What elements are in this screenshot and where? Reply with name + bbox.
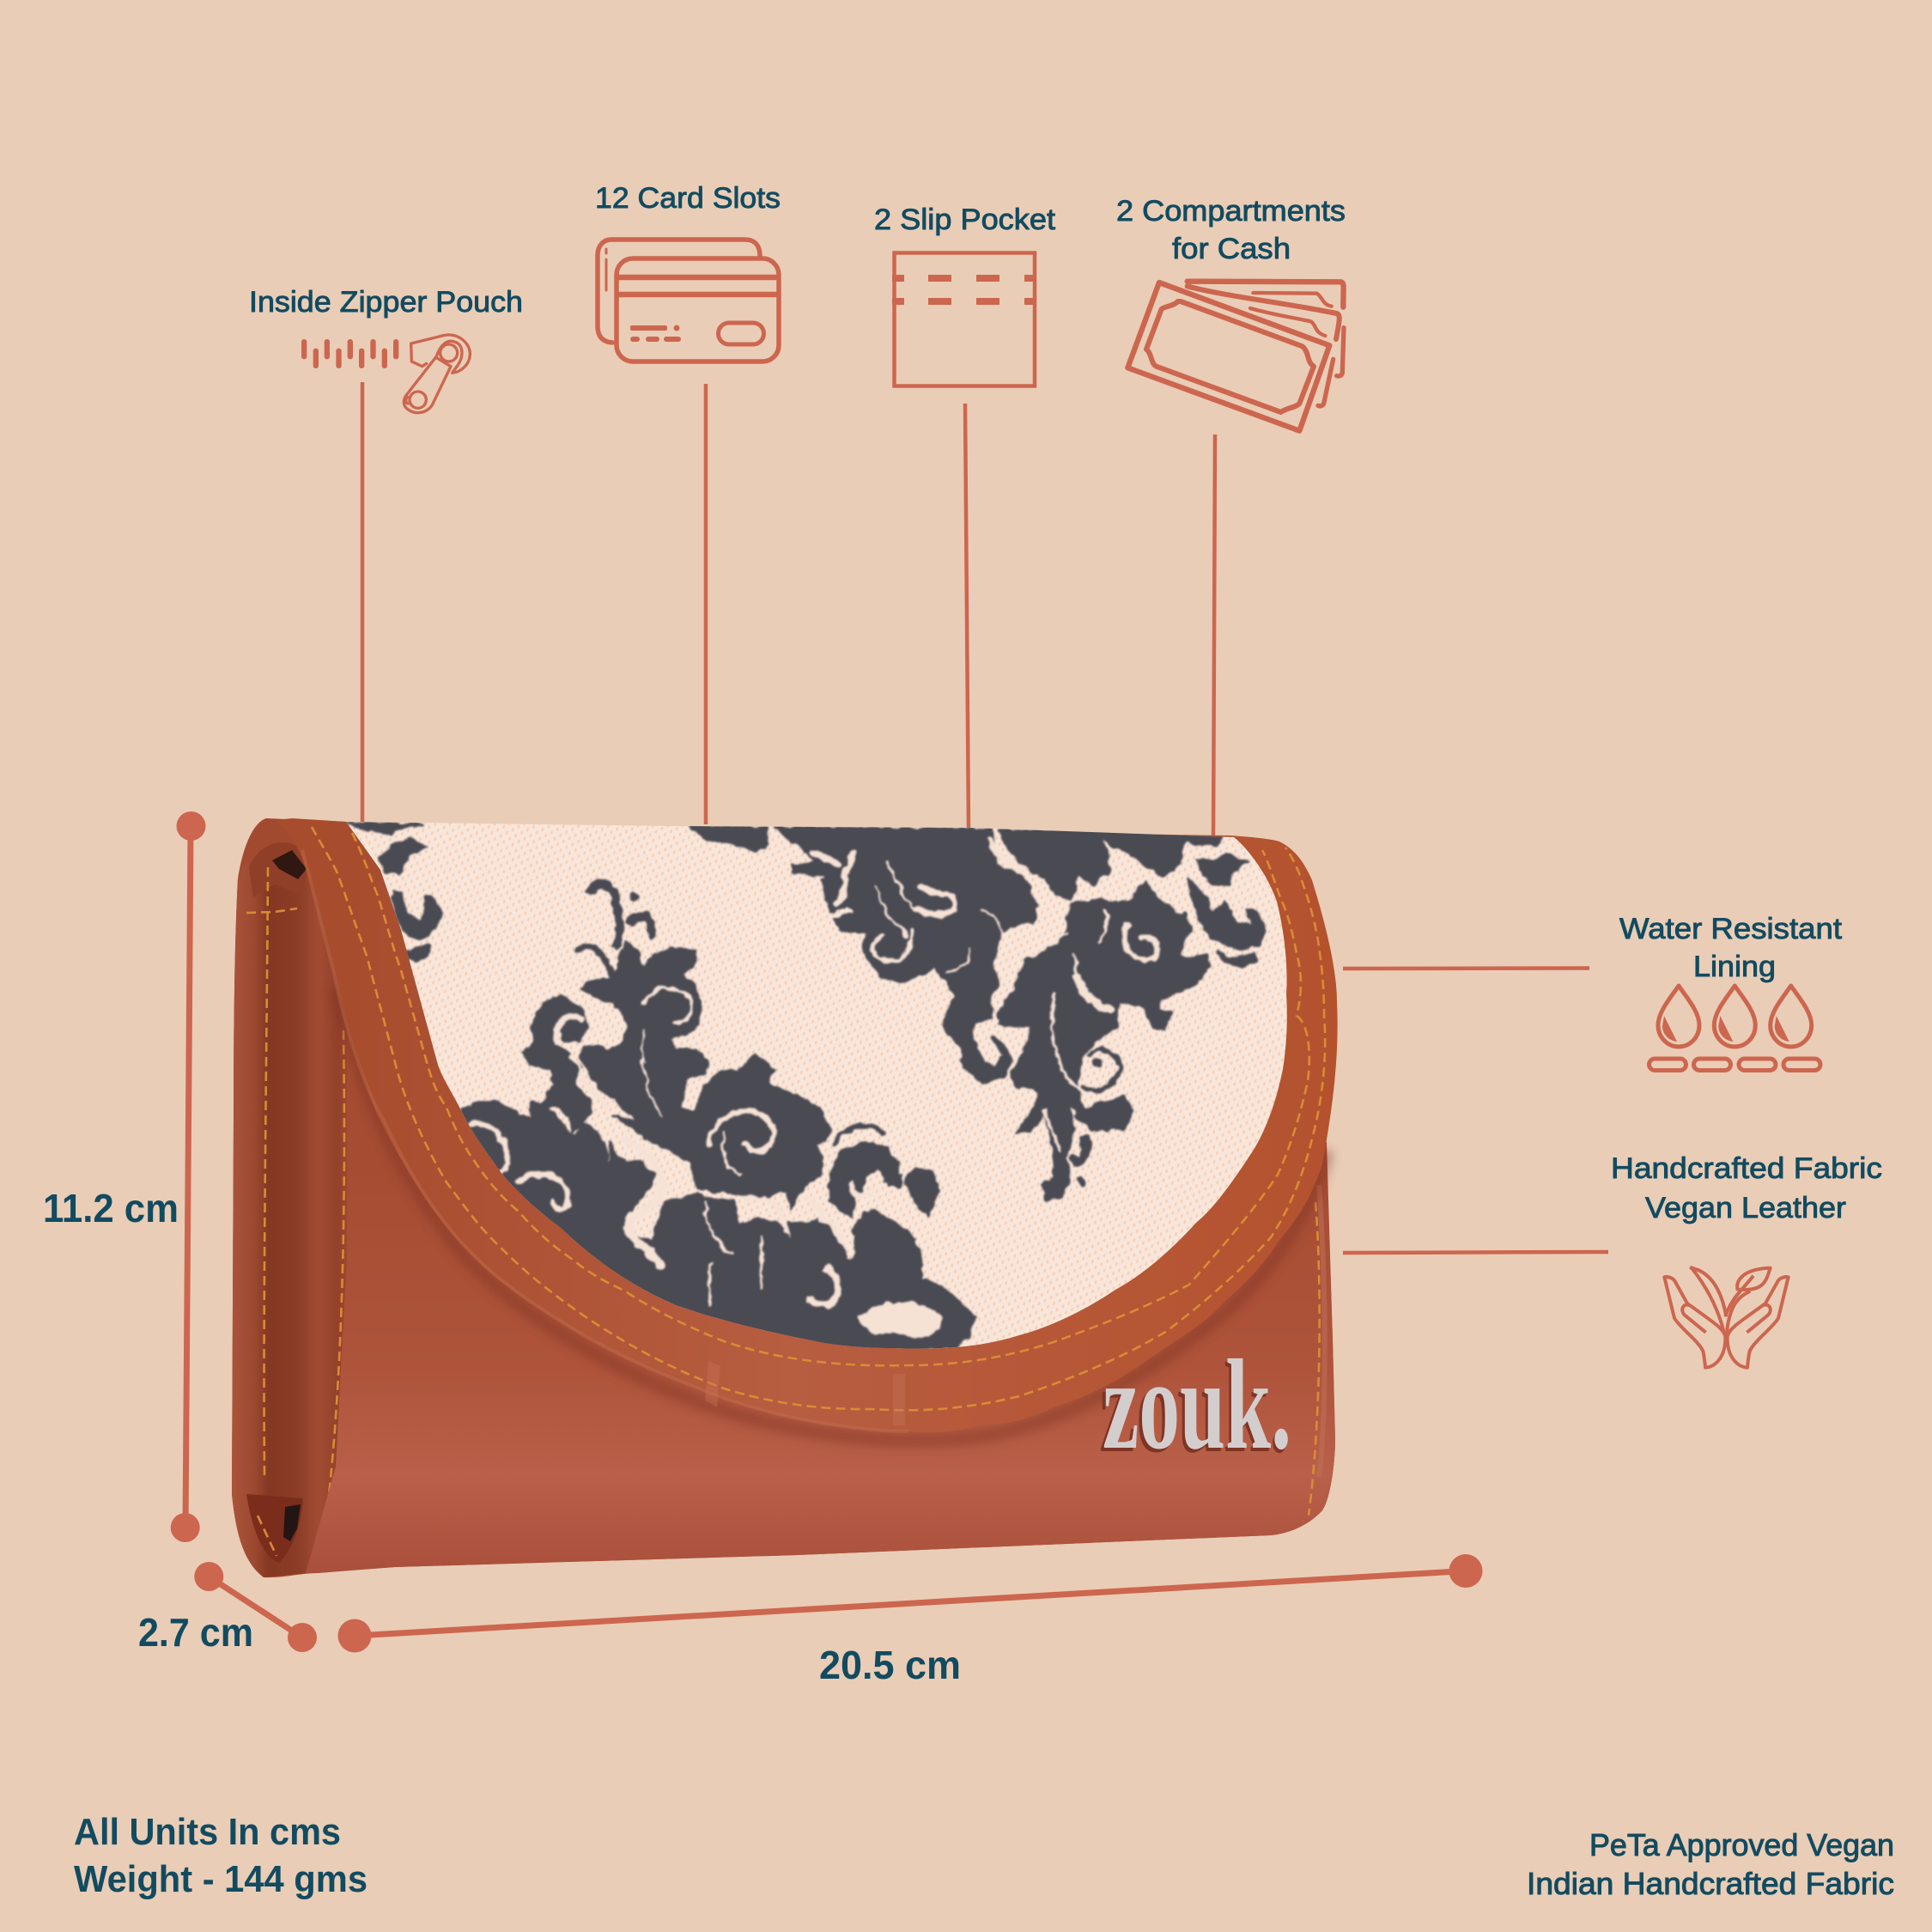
note: peta approved: Indian Handcrafted Fabric bbox=[1527, 1866, 1894, 1901]
label: handcrafted fabric vegan leather: Vegan Leather bbox=[1645, 1192, 1846, 1224]
printed fabric panel bbox=[326, 807, 1305, 1365]
label: compartments for cash: for Cash bbox=[1172, 233, 1291, 265]
icon: cards bbox=[598, 240, 779, 361]
note: peta approved: PeTa Approved Vegan bbox=[1589, 1827, 1894, 1862]
note: units and weight: All Units In cms bbox=[74, 1811, 341, 1853]
flap cast shadow bbox=[336, 987, 1327, 1441]
label: water resistant lining: Lining bbox=[1693, 951, 1776, 983]
icon: water drops bbox=[1649, 986, 1820, 1070]
damask print bbox=[346, 823, 1265, 1359]
icon: zipper bbox=[301, 335, 470, 413]
upper damask motif bbox=[690, 826, 1133, 1200]
lower-right damask ring bbox=[790, 1176, 976, 1351]
wallet silhouette bbox=[232, 818, 1335, 1577]
dimension: height bbox=[43, 811, 206, 1542]
zouk logo: zouk. bbox=[1103, 1334, 1291, 1476]
label: handcrafted fabric vegan leather: Handcrafted Fabric bbox=[1611, 1152, 1882, 1185]
left gusset bbox=[232, 863, 354, 1577]
upper damask light details bbox=[813, 839, 1110, 1151]
right damask fragments bbox=[1093, 830, 1265, 1030]
note: units and weight bbox=[74, 1811, 368, 1900]
zouk logo shadow: zouk. bbox=[1099, 1337, 1290, 1479]
lower damask motif bbox=[455, 884, 939, 1359]
label: water resistant lining bbox=[1619, 913, 1843, 983]
note: peta approved bbox=[1527, 1827, 1894, 1901]
label: inside zipper pouch: Inside Zipper Pouch bbox=[249, 286, 523, 319]
front panel bbox=[306, 1013, 1335, 1573]
right damask light details bbox=[1099, 910, 1157, 961]
lower damask light details bbox=[470, 987, 876, 1305]
gusset stitches and openings bbox=[246, 842, 344, 1567]
label: water resistant lining: Water Resistant bbox=[1619, 913, 1843, 945]
front panel right rim bbox=[1319, 1185, 1325, 1477]
label: slip pocket: 2 Slip Pocket bbox=[874, 204, 1056, 236]
dimension: depth: 2.7 cm bbox=[138, 1610, 253, 1655]
icon: hands with leaf bbox=[1664, 1268, 1789, 1368]
icon: pocket bbox=[892, 252, 1036, 386]
wallet product photo bbox=[232, 807, 1338, 1577]
label: handcrafted fabric vegan leather bbox=[1611, 1152, 1882, 1224]
top-left damask fragment bbox=[346, 823, 442, 962]
label: compartments for cash: 2 Compartments bbox=[1116, 195, 1346, 228]
flap border bbox=[276, 818, 1338, 1432]
label: compartments for cash bbox=[1116, 195, 1346, 265]
ring interior bbox=[807, 1268, 942, 1337]
flap crease highlights bbox=[705, 1361, 905, 1425]
dimension: depth bbox=[138, 1562, 317, 1655]
connector lines bbox=[362, 382, 1608, 1253]
note: units and weight: Weight - 144 gms bbox=[74, 1858, 368, 1900]
dimension: height: 11.2 cm bbox=[43, 1186, 179, 1230]
flap outer ridge bbox=[302, 850, 908, 1431]
icon: cash notes bbox=[1127, 282, 1344, 431]
dimension: width bbox=[338, 1554, 1482, 1687]
dimension: width: 20.5 cm bbox=[819, 1643, 961, 1687]
label: card slots: 12 Card Slots bbox=[595, 182, 781, 215]
flap stitches bbox=[312, 827, 1325, 1410]
